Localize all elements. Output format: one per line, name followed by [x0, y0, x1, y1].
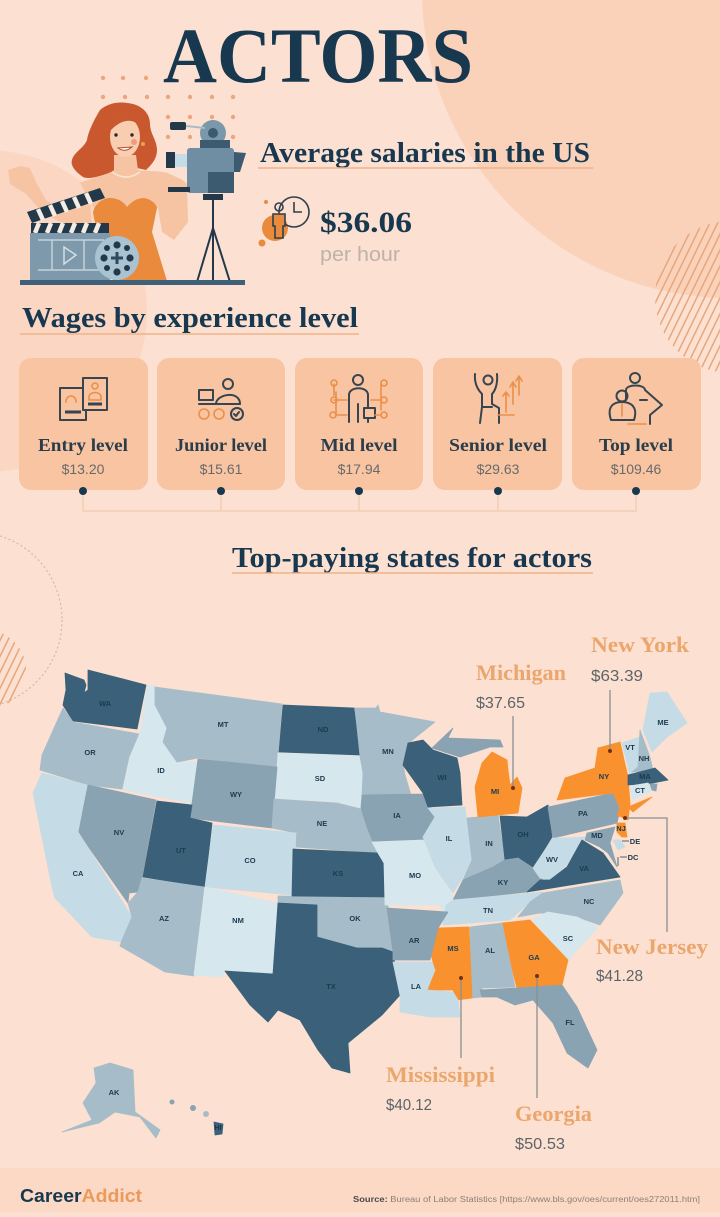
state abbreviations: WV	[546, 855, 558, 864]
panel: mid level	[295, 358, 423, 495]
icon: clock and worker	[258, 197, 309, 246]
state abbreviations: ND	[318, 725, 329, 734]
state abbreviations: MD	[591, 831, 603, 840]
heading: top-paying states: Top-paying states for actors	[232, 542, 592, 574]
state abbreviations: SC	[563, 934, 574, 943]
state abbreviations: DE	[630, 837, 640, 846]
state abbreviations: ME	[657, 718, 669, 727]
icon: executives	[610, 373, 662, 424]
dotted circle: left	[0, 532, 62, 708]
callout: New Jersey: New Jersey	[596, 934, 708, 959]
state abbreviations: VA	[579, 864, 590, 873]
state abbreviations: MS	[447, 944, 459, 953]
state abbreviations: NY	[599, 772, 609, 781]
striped circle: lower left	[0, 630, 26, 710]
illustration: actress with clapperboard and camera	[8, 76, 246, 285]
state abbreviations: MI	[491, 787, 499, 796]
necklace	[112, 172, 140, 177]
small leader ticks: DE and DC	[618, 841, 629, 866]
state abbreviations: MO	[409, 871, 421, 880]
state abbreviations: HI	[214, 1123, 222, 1132]
state abbreviations: IA	[393, 811, 401, 820]
callout: New Jersey: $41.28	[596, 968, 643, 985]
panel: entry level: $13.20	[62, 461, 105, 477]
state abbreviations: NH	[639, 754, 649, 763]
state abbreviations: AR	[409, 936, 420, 945]
state abbreviations: CA	[73, 869, 84, 878]
decorative dot grid	[101, 76, 235, 139]
title: ACTORS	[163, 12, 473, 99]
state abbreviations: CO	[244, 856, 256, 865]
heading: wages by experience level: Wages by experience level	[22, 303, 358, 334]
state abbreviations: CT	[635, 786, 645, 795]
striped circle: right	[655, 221, 720, 373]
state abbreviations: FL	[565, 1018, 575, 1027]
icon: worker at laptop	[199, 379, 243, 420]
callout: New Jersey	[596, 816, 708, 985]
neck and chest	[80, 155, 188, 240]
state abbreviations: PA	[578, 809, 589, 818]
state abbreviations: AK	[109, 1088, 120, 1097]
state abbreviations: AL	[485, 946, 495, 955]
state abbreviations: WA	[99, 699, 112, 708]
state abbreviations: MA	[639, 772, 651, 781]
icon: resumes	[60, 378, 107, 420]
panel: junior level: Junior level	[175, 435, 267, 455]
state abbreviations: TN	[483, 906, 493, 915]
state abbreviations: IN	[485, 839, 493, 848]
tripod	[197, 200, 230, 282]
background circle: left	[0, 150, 147, 472]
state abbreviations: SD	[315, 774, 326, 783]
icon: person with arms raised and growth arrows	[475, 374, 522, 423]
background circle: top right	[422, 0, 720, 298]
state abbreviations: ID	[157, 766, 165, 775]
panel: entry level: Entry level	[38, 435, 128, 455]
Hawaii	[170, 1100, 223, 1135]
state abbreviations: NJ	[616, 824, 626, 833]
raised hand and forearm	[8, 166, 92, 228]
panel: junior level	[157, 358, 285, 495]
state abbreviations: WI	[437, 773, 447, 782]
state abbreviations: MN	[382, 747, 394, 756]
clapperboard	[27, 188, 110, 280]
state abbreviations: TX	[326, 982, 336, 991]
state abbreviations: VT	[625, 743, 635, 752]
callout: Michigan: Michigan	[476, 660, 566, 685]
state abbreviations: MT	[218, 720, 229, 729]
stat: hourly salary: $36.06	[320, 206, 412, 239]
panel: top level: $109.46	[611, 461, 662, 477]
panel: senior level: Senior level	[449, 435, 547, 455]
state abbreviations: NC	[584, 897, 595, 906]
footer band	[0, 1168, 720, 1212]
state abbreviations: OK	[349, 914, 361, 923]
state abbreviations: AZ	[159, 914, 169, 923]
panel: senior level	[433, 358, 562, 495]
face	[110, 117, 140, 157]
callout: Georgia: $50.53	[515, 1136, 565, 1153]
state abbreviations: NE	[317, 819, 327, 828]
connector between levels	[83, 491, 636, 511]
panel: top level	[572, 358, 701, 495]
callout: Michigan: $37.65	[476, 695, 525, 712]
callout: New York: New York	[591, 632, 690, 657]
callout: Michigan	[476, 660, 566, 790]
panel: entry level	[19, 358, 148, 495]
state abbreviations: GA	[528, 953, 540, 962]
stat unit: per hour	[320, 244, 400, 266]
source note: Source: Bureau of Labor Statistics [https://www.bls.gov/oes/current/oes272011.htm]	[353, 1195, 700, 1204]
callout: Mississippi: Mississippi	[386, 1062, 495, 1087]
hair	[72, 103, 157, 178]
callout: Mississippi	[386, 976, 495, 1114]
film reel	[95, 236, 139, 280]
state abbreviations: IL	[446, 834, 453, 843]
panel: junior level: $15.61	[200, 461, 243, 477]
state abbreviations: KY	[498, 878, 508, 887]
state abbreviations: LA	[411, 982, 422, 991]
heading: average salaries: Average salaries in the US	[260, 138, 590, 169]
panel: mid level: $17.94	[338, 461, 381, 477]
panel: mid level: Mid level	[320, 435, 398, 455]
camera	[166, 120, 246, 200]
panel: senior level: $29.63	[477, 461, 520, 477]
state abbreviations: DC	[628, 853, 639, 862]
state abbreviations: NV	[114, 828, 124, 837]
ground line	[20, 280, 245, 285]
state abbreviations	[73, 699, 669, 1132]
state abbreviations: NM	[232, 916, 244, 925]
callout: New York	[591, 632, 690, 753]
callout: Georgia: Georgia	[515, 1101, 592, 1126]
dress	[93, 198, 167, 281]
icon: worker with briefcase	[330, 375, 387, 422]
callout: New York: $63.39	[591, 668, 643, 685]
US map	[33, 670, 687, 1138]
state abbreviations: UT	[176, 846, 186, 855]
callout: Mississippi: $40.12	[386, 1097, 432, 1114]
state abbreviations: OH	[517, 830, 529, 839]
state abbreviations: KS	[333, 869, 343, 878]
state abbreviations: WY	[230, 790, 242, 799]
Alaska	[62, 1063, 160, 1138]
state abbreviations: OR	[84, 748, 96, 757]
panel: top level: Top level	[599, 435, 673, 455]
callout: Georgia	[515, 974, 592, 1153]
logo: CareerAddict: Career Addict	[20, 1186, 142, 1206]
